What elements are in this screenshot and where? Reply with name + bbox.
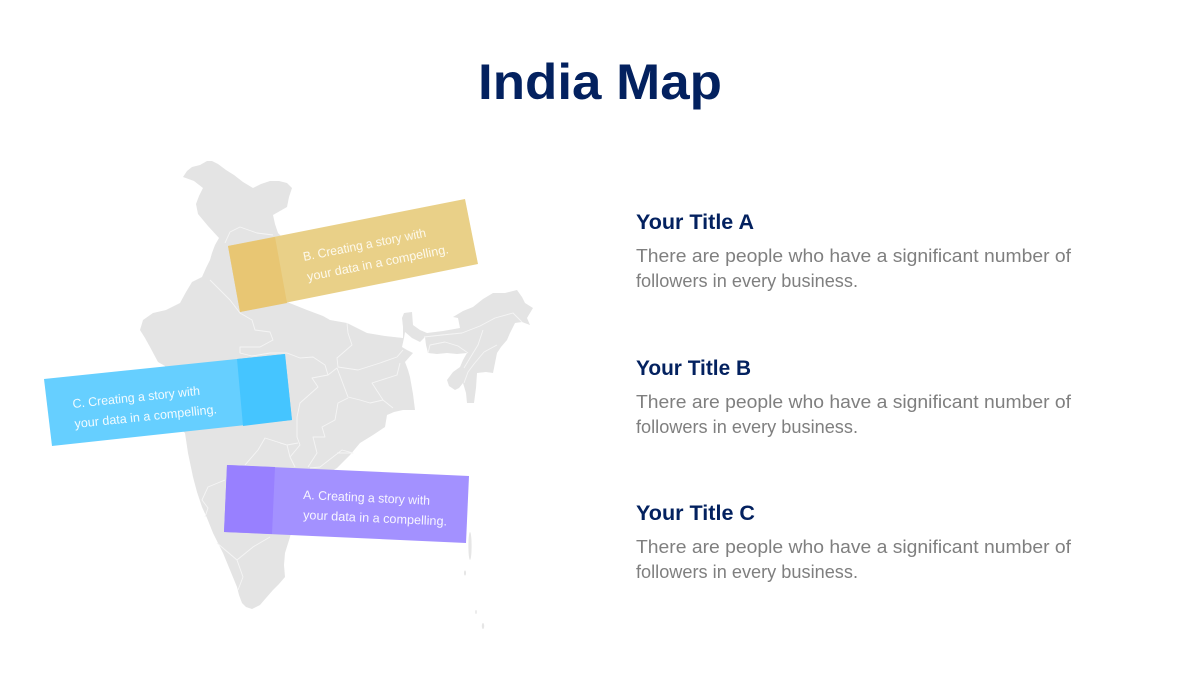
callout A text: A. Creating a story with <box>303 488 430 508</box>
callout B text <box>302 226 450 284</box>
text block: Your Title A <box>636 210 1072 291</box>
map: mainland and north-east landmass <box>140 161 533 609</box>
text block: Your Title C: Your Title C <box>636 501 755 525</box>
callout A: purple banner <box>224 465 469 543</box>
callout C: blue banner <box>44 354 292 446</box>
text block: Your Title B <box>636 356 1072 437</box>
callout C text: your data in a compelling. <box>74 402 218 431</box>
callout C text: C. Creating a story with <box>72 384 201 411</box>
text block: Your Title C: followers in every business. <box>636 561 858 582</box>
title: India Map <box>478 54 722 110</box>
text block: Your Title B: There are people who have a significant number of <box>636 391 1072 412</box>
map: state borders <box>202 227 522 590</box>
text block: Your Title A: There are people who have a significant number of <box>636 245 1072 266</box>
text block: Your Title B: followers in every business. <box>636 416 858 437</box>
callout C text <box>72 384 218 431</box>
callout B text: B. Creating a story with <box>302 226 427 264</box>
text block: Your Title C <box>636 501 1072 582</box>
text block: Your Title B: Your Title B <box>636 356 751 380</box>
map of India <box>140 161 533 629</box>
map: Andaman and Nicobar islands <box>464 532 484 629</box>
callout B text: your data in a compelling. <box>306 242 450 284</box>
text block: Your Title A: Your Title A <box>636 210 754 234</box>
callout A text <box>303 488 447 529</box>
text block: Your Title C: There are people who have a significant number of <box>636 536 1072 557</box>
callout A text: your data in a compelling. <box>303 508 447 529</box>
callout B: gold banner <box>228 199 478 312</box>
text block: Your Title A: followers in every business. <box>636 270 858 291</box>
